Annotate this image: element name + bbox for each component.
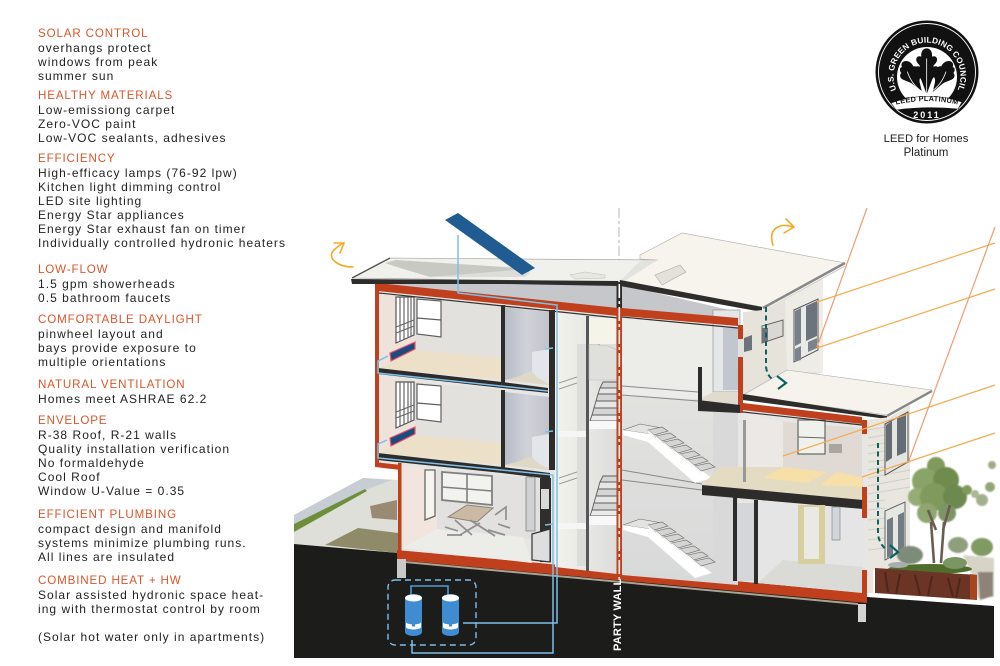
text block: combined heat and hot water: COMBINED HEAT + HW [38, 574, 182, 587]
ribbon [891, 96, 962, 110]
text block: solar control: windows from peak [38, 55, 158, 69]
logo: LEED Platinum seal [876, 20, 978, 124]
text block: combined heat and hot water: ing with thermostat control by room [38, 602, 261, 616]
text block: healthy materials [38, 89, 227, 145]
panel: right upper bedroom [702, 413, 863, 509]
panel: right stair hall [622, 310, 743, 585]
text block: efficient plumbing: compact design and manifold [38, 522, 222, 536]
text block: solar control [38, 27, 158, 83]
text block: envelope: Cool Roof [38, 470, 101, 484]
text block: healthy materials: Low-VOC sealants, adhesives [38, 131, 227, 145]
slab over ground floor [375, 462, 401, 470]
text block: envelope: No formaldehyde [38, 456, 145, 470]
text block: efficient plumbing: systems minimize plumbing runs. [38, 536, 247, 550]
floor slab [397, 550, 867, 622]
lower stair [590, 476, 617, 516]
text block: efficient plumbing: EFFICIENT PLUMBING [38, 508, 177, 521]
callout leader lines [783, 208, 995, 477]
upper right roof [620, 233, 845, 312]
low roof left [351, 258, 655, 286]
text block: combined heat and hot water: (Solar hot water only in apartments) [38, 630, 265, 644]
text block: comfortable daylight: pinwheel layout and [38, 327, 164, 341]
text block: low-flow [38, 263, 176, 305]
text block: low-flow: LOW-FLOW [38, 263, 108, 276]
upper stair flight [623, 424, 715, 483]
dining table [445, 505, 510, 536]
solar water piping [378, 235, 557, 653]
text block: envelope: Quality installation verification [38, 442, 230, 456]
window: bay large [794, 299, 818, 362]
text block: low-flow: 0.5 bathroom faucets [38, 291, 171, 305]
text block: envelope: ENVELOPE [38, 414, 107, 427]
text block: efficiency: Kitchen light dimming control [38, 180, 221, 194]
text block: natural ventilation [38, 378, 207, 406]
icon: hydronic heater [390, 427, 415, 446]
text block: efficient plumbing [38, 508, 247, 564]
text block: efficiency: Energy Star exhaust fan on timer [38, 222, 246, 236]
text block: envelope [38, 414, 230, 498]
text block: efficiency [38, 152, 286, 250]
seal lettering: U.S. GREEN BUILDING COUNCIL [888, 36, 966, 92]
text block: solar control: overhangs protect [38, 41, 152, 55]
text block: natural ventilation: Homes meet ASHRAE 62.2 [38, 392, 207, 406]
text block: efficient plumbing: All lines are insulated [38, 550, 175, 564]
text block: natural ventilation: NATURAL VENTILATION [38, 378, 186, 391]
party wall [616, 208, 622, 584]
arrow: roof airflow right [772, 219, 794, 245]
text block: comfortable daylight: bays provide exposure to [38, 341, 197, 355]
text block: combined heat and hot water: Solar assisted hydronic space heat- [38, 588, 264, 602]
text block: envelope: R-38 Roof, R-21 walls [38, 428, 177, 442]
exterior wall red framing [375, 283, 867, 594]
ground [294, 544, 994, 658]
balcony [698, 367, 740, 413]
thin dark lines under beams [379, 293, 862, 425]
text block: efficiency: EFFICIENCY [38, 152, 116, 165]
text block: efficiency: Individually controlled hydronic heaters [38, 236, 286, 250]
window: corner [744, 335, 752, 352]
label: party wall: PARTY WALL [612, 578, 624, 651]
text block: efficiency: LED site lighting [38, 194, 142, 208]
lower stair flight [623, 519, 715, 578]
arrow: water runoff upper [766, 307, 786, 389]
landscape: sidewalk and planting at left [294, 478, 400, 553]
water tanks [388, 580, 476, 645]
text block: comfortable daylight: COMFORTABLE DAYLIGHT [38, 313, 203, 326]
icon: hydronic heater [390, 342, 415, 361]
panel: right ground floor entry room [733, 497, 863, 593]
text block: comfortable daylight: multiple orientations [38, 355, 166, 369]
upper stair [590, 382, 617, 421]
text block: efficiency: Energy Star appliances [38, 208, 185, 222]
caption: Platinum: Platinum [904, 147, 948, 159]
panel: stair hall [549, 310, 617, 574]
panel: middle floor apartment [378, 377, 550, 479]
oak leaf [900, 48, 955, 93]
arrow: roof airflow left [331, 243, 353, 267]
text block: healthy materials: Low-emissiong carpet [38, 103, 175, 117]
year: 2011 [913, 110, 941, 120]
icon: tank 2 [442, 594, 459, 636]
roof soffit [378, 281, 738, 322]
text block: envelope: Window U-Value = 0.35 [38, 484, 185, 498]
icon: tank 1 [405, 594, 422, 636]
lower right roof [743, 370, 932, 419]
window: small upper [762, 320, 783, 343]
text block: solar control: SOLAR CONTROL [38, 27, 148, 40]
text block: solar control: summer sun [38, 69, 114, 83]
background landscape right [948, 461, 996, 600]
text block: healthy materials: HEALTHY MATERIALS [38, 89, 173, 102]
upper exterior wall [738, 279, 823, 398]
tree and planter [875, 457, 977, 600]
ribbon lettering: LEED PLATINUM [896, 96, 958, 104]
text block: combined heat and hot water [38, 574, 265, 644]
text block: efficiency: High-efficacy lamps (76-92 lpw) [38, 166, 238, 180]
caption: LEED for Homes: LEED for Homes [884, 133, 968, 145]
text block: low-flow: 1.5 gpm showerheads [38, 277, 176, 291]
panel: upper floor apartment [378, 292, 549, 393]
arrow: water runoff lower [878, 443, 898, 558]
siding exterior wall [867, 405, 910, 593]
solar panel [445, 213, 535, 275]
building interior base [379, 284, 867, 593]
panel: ground floor dining room [401, 465, 551, 563]
text block: comfortable daylight [38, 313, 203, 369]
planter [875, 568, 977, 600]
text block: healthy materials: Zero-VOC paint [38, 117, 136, 131]
